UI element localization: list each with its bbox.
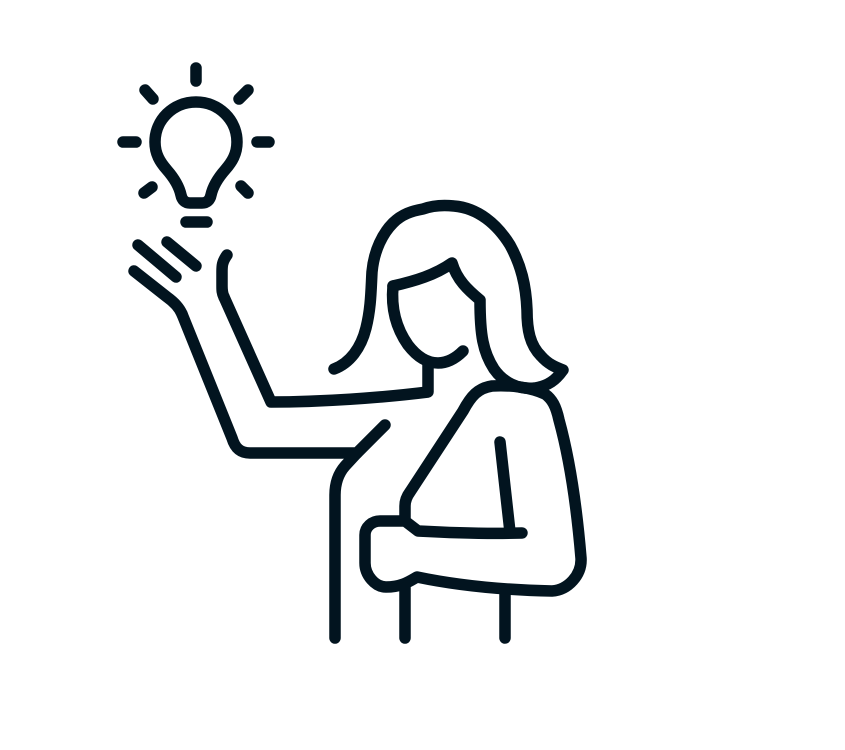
inner sleeve line (500, 442, 510, 532)
bulb outline (155, 102, 237, 203)
fingers (134, 242, 227, 314)
inner arm and neck (224, 297, 428, 402)
icon: woman figure (134, 205, 581, 638)
hair (334, 205, 563, 388)
face (393, 286, 463, 363)
torso left line (335, 453, 357, 638)
raised arm (182, 314, 385, 453)
lower body lines (399, 588, 411, 638)
body and folded arm (365, 386, 581, 591)
bulb base (186, 216, 207, 228)
icon: lightbulb (123, 68, 269, 222)
light rays (123, 68, 269, 193)
